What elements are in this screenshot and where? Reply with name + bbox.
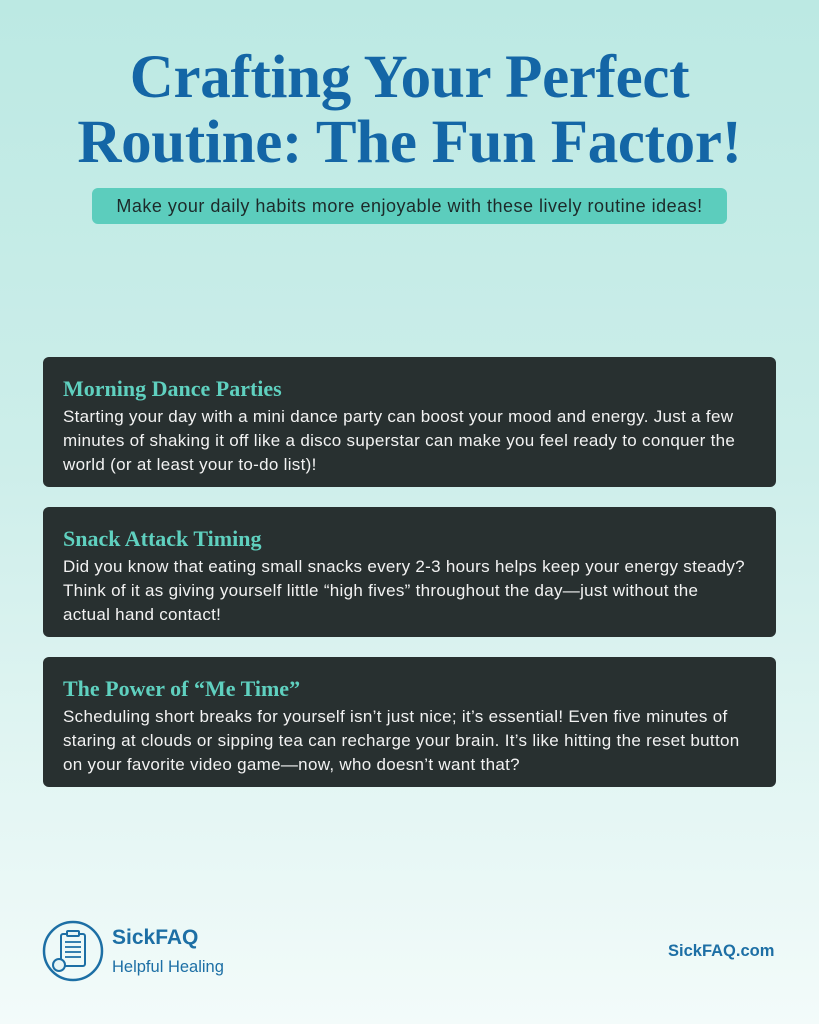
panel: me time: staring at clouds or sipping tea can recharge your brain. It’s like hitting the reset button [63,731,740,750]
subtitle: Make your daily habits more enjoyable with these lively routine ideas! [116,196,703,216]
panel: me time: on your favorite video game—now, who doesn’t want that? [63,755,520,774]
panel: morning dance parties: minutes of shaking it off like a disco superstar can make you feel ready to conquer the [63,431,735,450]
tagline: Helpful Healing [112,958,224,976]
brand name: SickFAQ [112,926,198,949]
panel: snack attack timing: Did you know that eating small snacks every 2-3 hours helps keep your energy steady? [63,557,745,576]
panel: morning dance parties [43,357,776,487]
panel: me time: The Power of “Me Time” [63,676,300,701]
panel: morning dance parties: Morning Dance Parties [63,376,282,401]
title: Routine: The Fun Factor! [77,109,742,176]
panel: snack attack timing: Snack Attack Timing [63,526,261,551]
panel: me time [43,657,776,787]
website: SickFAQ.com [668,942,774,960]
title [77,44,742,176]
panel: snack attack timing [43,507,776,637]
panel: snack attack timing: actual hand contact! [63,605,221,624]
panel: morning dance parties: Starting your day with a mini dance party can boost your mood and energy. Just a few [63,407,733,426]
panel: me time: Scheduling short breaks for yourself isn’t just nice; it’s essential! Even five minutes of [63,707,728,726]
panel: morning dance parties: world (or at least your to-do list)! [63,455,317,474]
icon: logo [42,920,104,982]
subtitle [92,188,727,224]
panel: snack attack timing: Think of it as giving yourself little “high fives” throughout the day—just without the [63,581,698,600]
title: Crafting Your Perfect [130,44,689,111]
